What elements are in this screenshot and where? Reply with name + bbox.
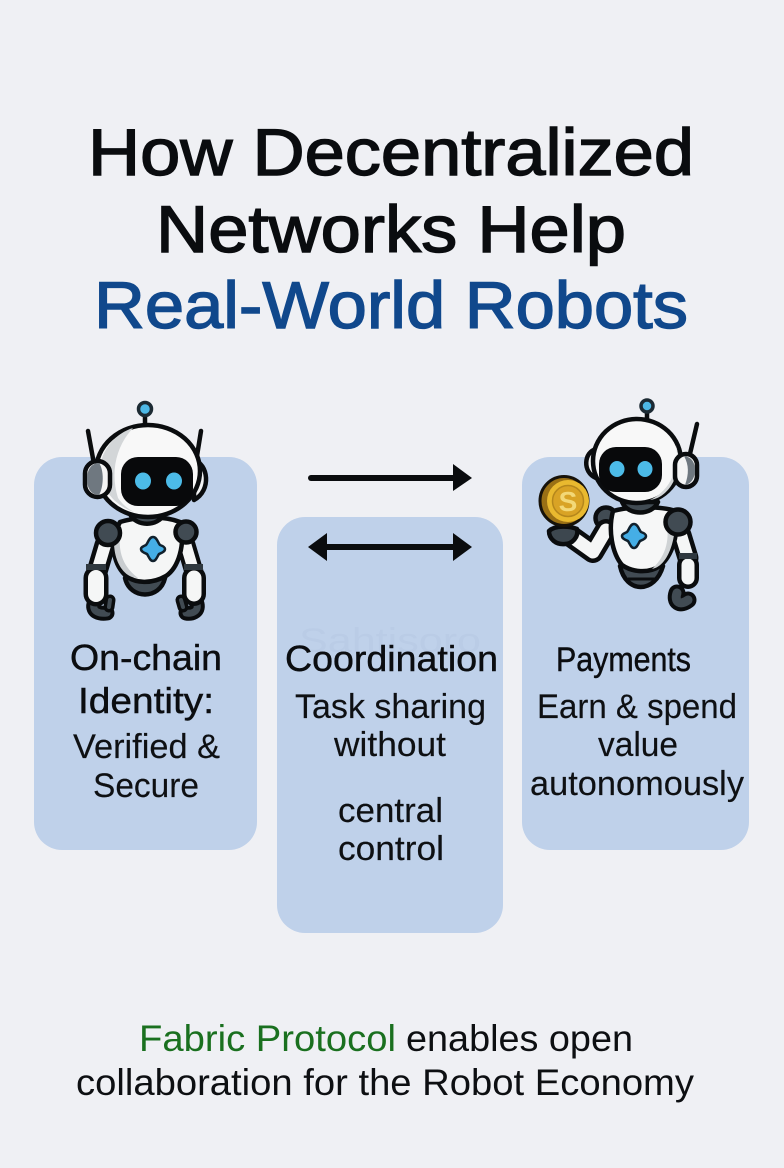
text block: coordination: Coordination: [285, 638, 498, 679]
right ear: [194, 460, 206, 500]
text block: on-chain identity: [70, 637, 222, 805]
head: [96, 425, 200, 517]
text block: on-chain identity: Secure: [93, 767, 199, 805]
hip: [620, 566, 663, 587]
visor: [121, 457, 193, 506]
left arm: [596, 508, 616, 528]
body: [611, 507, 677, 571]
title: Real-World Robots: [94, 268, 688, 342]
faint ghost text: Sahtisoro: [299, 622, 481, 660]
text block: on-chain identity: On-chain: [70, 637, 222, 678]
hip: [125, 578, 165, 594]
title: How Decentralized: [88, 115, 694, 189]
text block: on-chain identity: Identity:: [78, 680, 214, 721]
text block: payments: [530, 641, 744, 803]
text block: coordination: central: [338, 792, 443, 830]
left ear: [85, 461, 110, 497]
text block: coordination: control: [338, 830, 444, 868]
text block: coordination: without: [333, 726, 447, 764]
chest star: [141, 537, 165, 561]
eyes: [610, 461, 624, 477]
title: Networks Help: [156, 192, 626, 266]
arrow: one-way: [311, 464, 472, 491]
right ear: [675, 454, 697, 487]
footer tagline: Fabric Protocol: [139, 1018, 396, 1059]
icon: identity robot: [85, 402, 206, 613]
panel: on-chain identity: [34, 457, 257, 850]
right arm: [681, 535, 688, 558]
shoulder: [666, 510, 690, 534]
left ear: [586, 449, 596, 478]
neck: [130, 514, 164, 524]
body: [114, 518, 182, 582]
text block: payments: value: [598, 726, 678, 764]
text block: payments: autonomously: [530, 765, 744, 803]
coin: [540, 476, 589, 526]
panel: coordination: [277, 517, 503, 933]
text block: payments: Earn & spend: [537, 688, 737, 726]
arrow: two-way: [308, 533, 472, 561]
left arm: [97, 545, 105, 572]
footer tagline: collaboration for the Robot Economy: [76, 1062, 695, 1103]
visor: [599, 447, 662, 492]
eyes: [135, 472, 151, 490]
title: [88, 115, 694, 342]
text block: coordination: [285, 638, 498, 868]
coin: S: [559, 486, 577, 517]
right arm: [186, 545, 194, 572]
footer tagline: enables open: [406, 1018, 633, 1059]
panel: payments: [522, 457, 749, 850]
neck: [622, 502, 658, 512]
shoulders: [96, 521, 120, 545]
icon: payment robot with coin: [540, 400, 697, 603]
text block: coordination: Task sharing: [295, 688, 486, 726]
head: [593, 419, 681, 503]
footer tagline: [76, 1018, 695, 1103]
chest star: [622, 524, 646, 548]
text block: payments: Payments: [556, 641, 691, 679]
hand: [549, 527, 577, 544]
text block: on-chain identity: Verified &: [73, 728, 220, 766]
